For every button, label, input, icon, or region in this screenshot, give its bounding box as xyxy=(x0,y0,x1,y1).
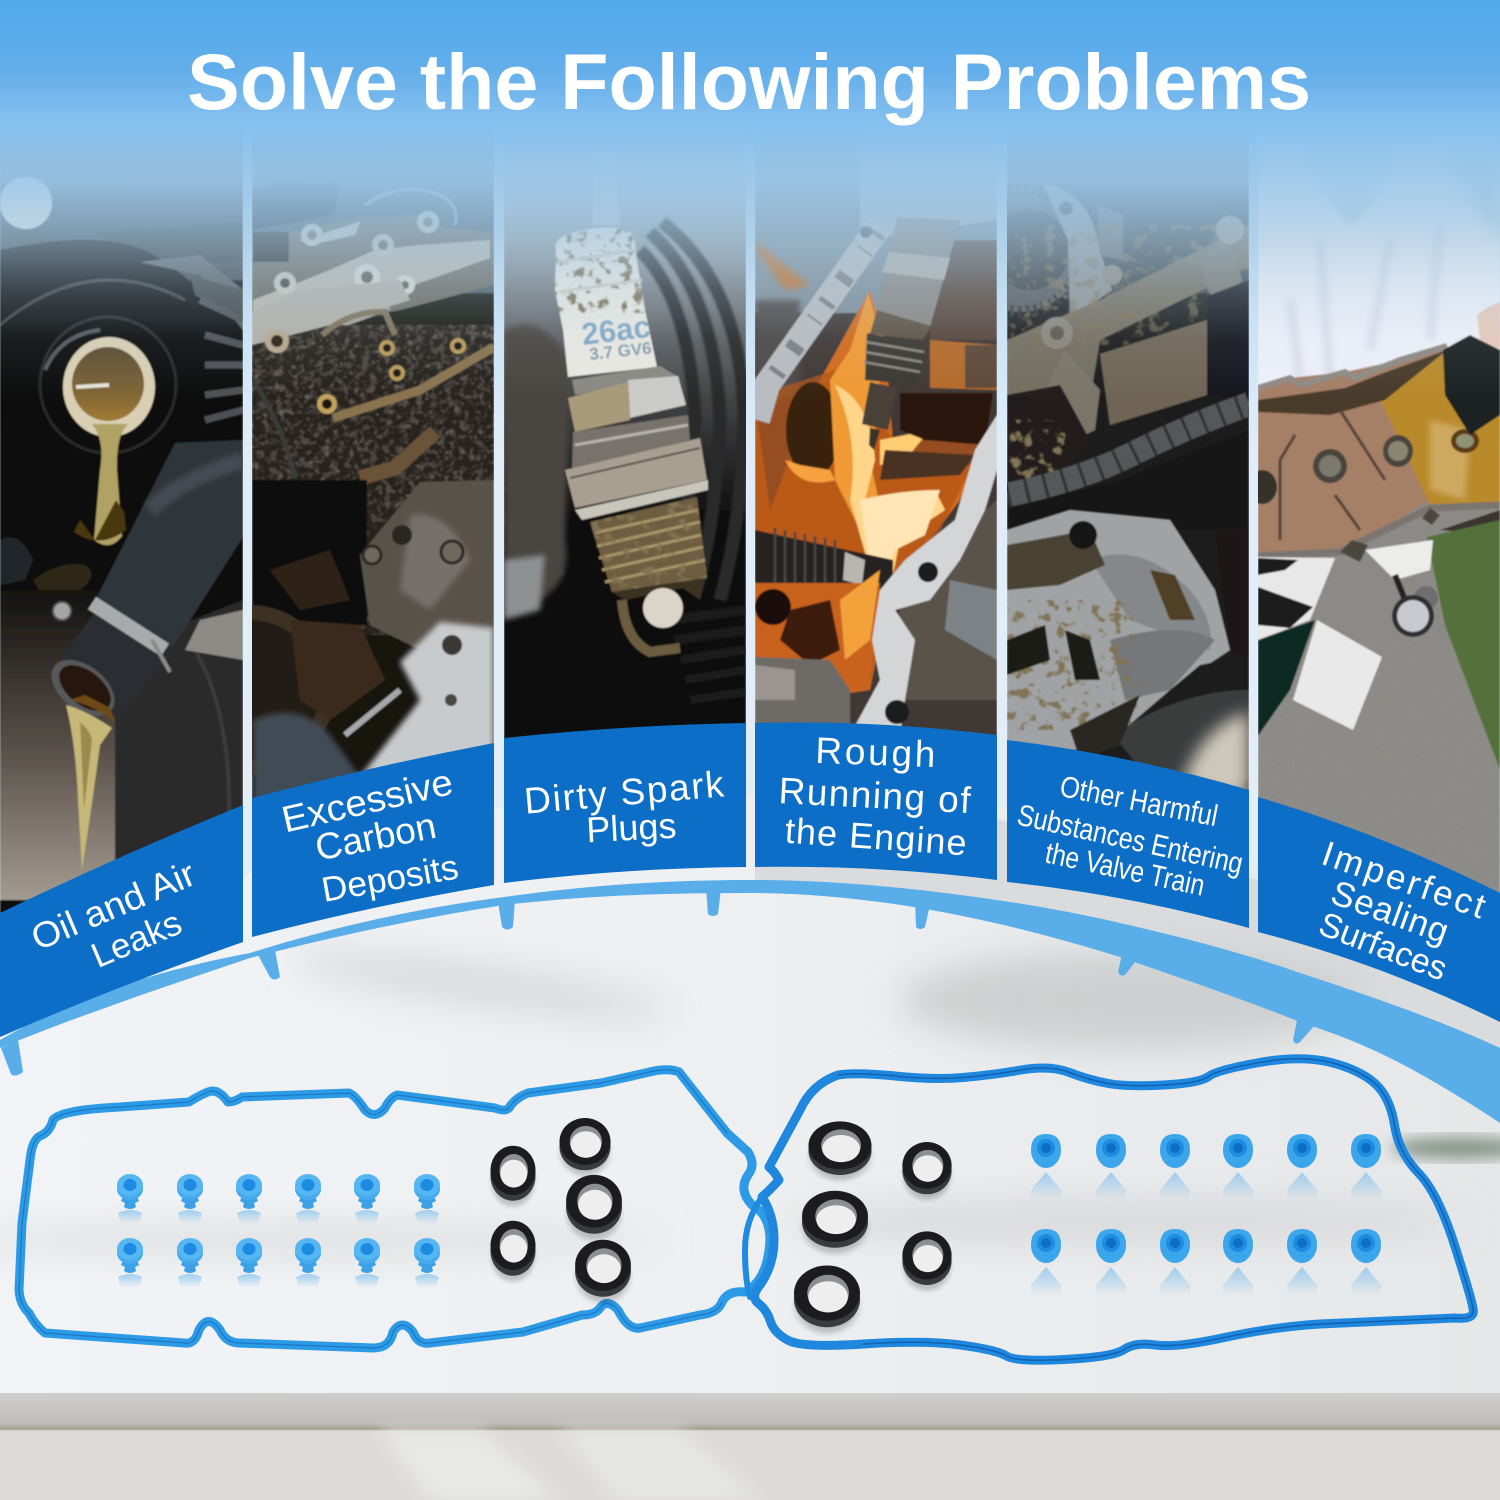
photo: dirty spark plug: 26ac xyxy=(580,309,652,352)
light blue arc rail with ticks xyxy=(0,880,1500,1123)
photo: dirty spark plug: 3.7 GV6 xyxy=(588,339,652,364)
photo: dirty spark plug xyxy=(504,191,746,738)
banner: Dirty Spark Plugs: Dirty Spark xyxy=(523,763,726,822)
banner: Other Harmful Substances Entering the Valve Train: the Valve Train xyxy=(1042,837,1208,903)
left black seal rings xyxy=(490,1118,631,1303)
photo: oil pouring from filler cap xyxy=(0,157,243,913)
title: Solve the Following Problems xyxy=(187,37,1311,126)
right valve cover gasket xyxy=(745,1059,1473,1360)
banner: Rough Running of the Engine: the Engine xyxy=(784,810,968,863)
left valve cover gasket xyxy=(19,1070,770,1348)
fog fade and blue header xyxy=(0,0,1500,400)
banner: Dirty Spark Plugs xyxy=(504,723,746,883)
photo: contaminated valve train xyxy=(1007,158,1249,790)
banner: Other Harmful Substances Entering the Valve Train: Other Harmful xyxy=(1057,770,1220,833)
right bushes: upper row xyxy=(1031,1134,1381,1200)
banner: Dirty Spark Plugs: Plugs xyxy=(585,805,677,850)
banner: Rough Running of the Engine: Running of xyxy=(778,770,972,821)
banner: Other Harmful Substances Entering the Valve Train xyxy=(1007,740,1249,928)
banner: Imperfect Sealing Surfaces: Sealing xyxy=(1326,873,1454,951)
banner: Excessive Carbon Deposits: Carbon xyxy=(312,805,439,868)
banner: Excessive Carbon Deposits: Excessive xyxy=(278,761,457,840)
photo: excessive carbon on engine xyxy=(252,163,494,798)
left bushes: upper row xyxy=(117,1174,440,1224)
left bushes: lower row xyxy=(117,1238,440,1288)
banner: Rough Running of the Engine: Rough xyxy=(815,730,936,775)
lower table background xyxy=(0,795,1500,1500)
right black seal rings xyxy=(794,1121,952,1334)
banner: Rough Running of the Engine xyxy=(755,722,997,880)
banner: Excessive Carbon Deposits xyxy=(252,743,494,937)
photo: mechanic holding valve cover xyxy=(1258,190,1500,893)
right bushes: lower row xyxy=(1031,1229,1381,1295)
banner: Oil and Air Leaks: Oil and Air xyxy=(25,853,201,958)
banner: Oil and Air Leaks: Leaks xyxy=(86,903,187,976)
banner: Other Harmful Substances Entering the Valve Train: Substances Entering xyxy=(1014,799,1246,881)
banner: Oil and Air Leaks xyxy=(0,805,243,1037)
photo: engine fire xyxy=(755,182,997,735)
banner: Excessive Carbon Deposits: Deposits xyxy=(319,847,461,910)
banner: Imperfect Sealing Surfaces xyxy=(1258,797,1500,1022)
banner: Imperfect Sealing Surfaces: Surfaces xyxy=(1314,905,1452,988)
banner: Imperfect Sealing Surfaces: Imperfect xyxy=(1317,834,1491,926)
